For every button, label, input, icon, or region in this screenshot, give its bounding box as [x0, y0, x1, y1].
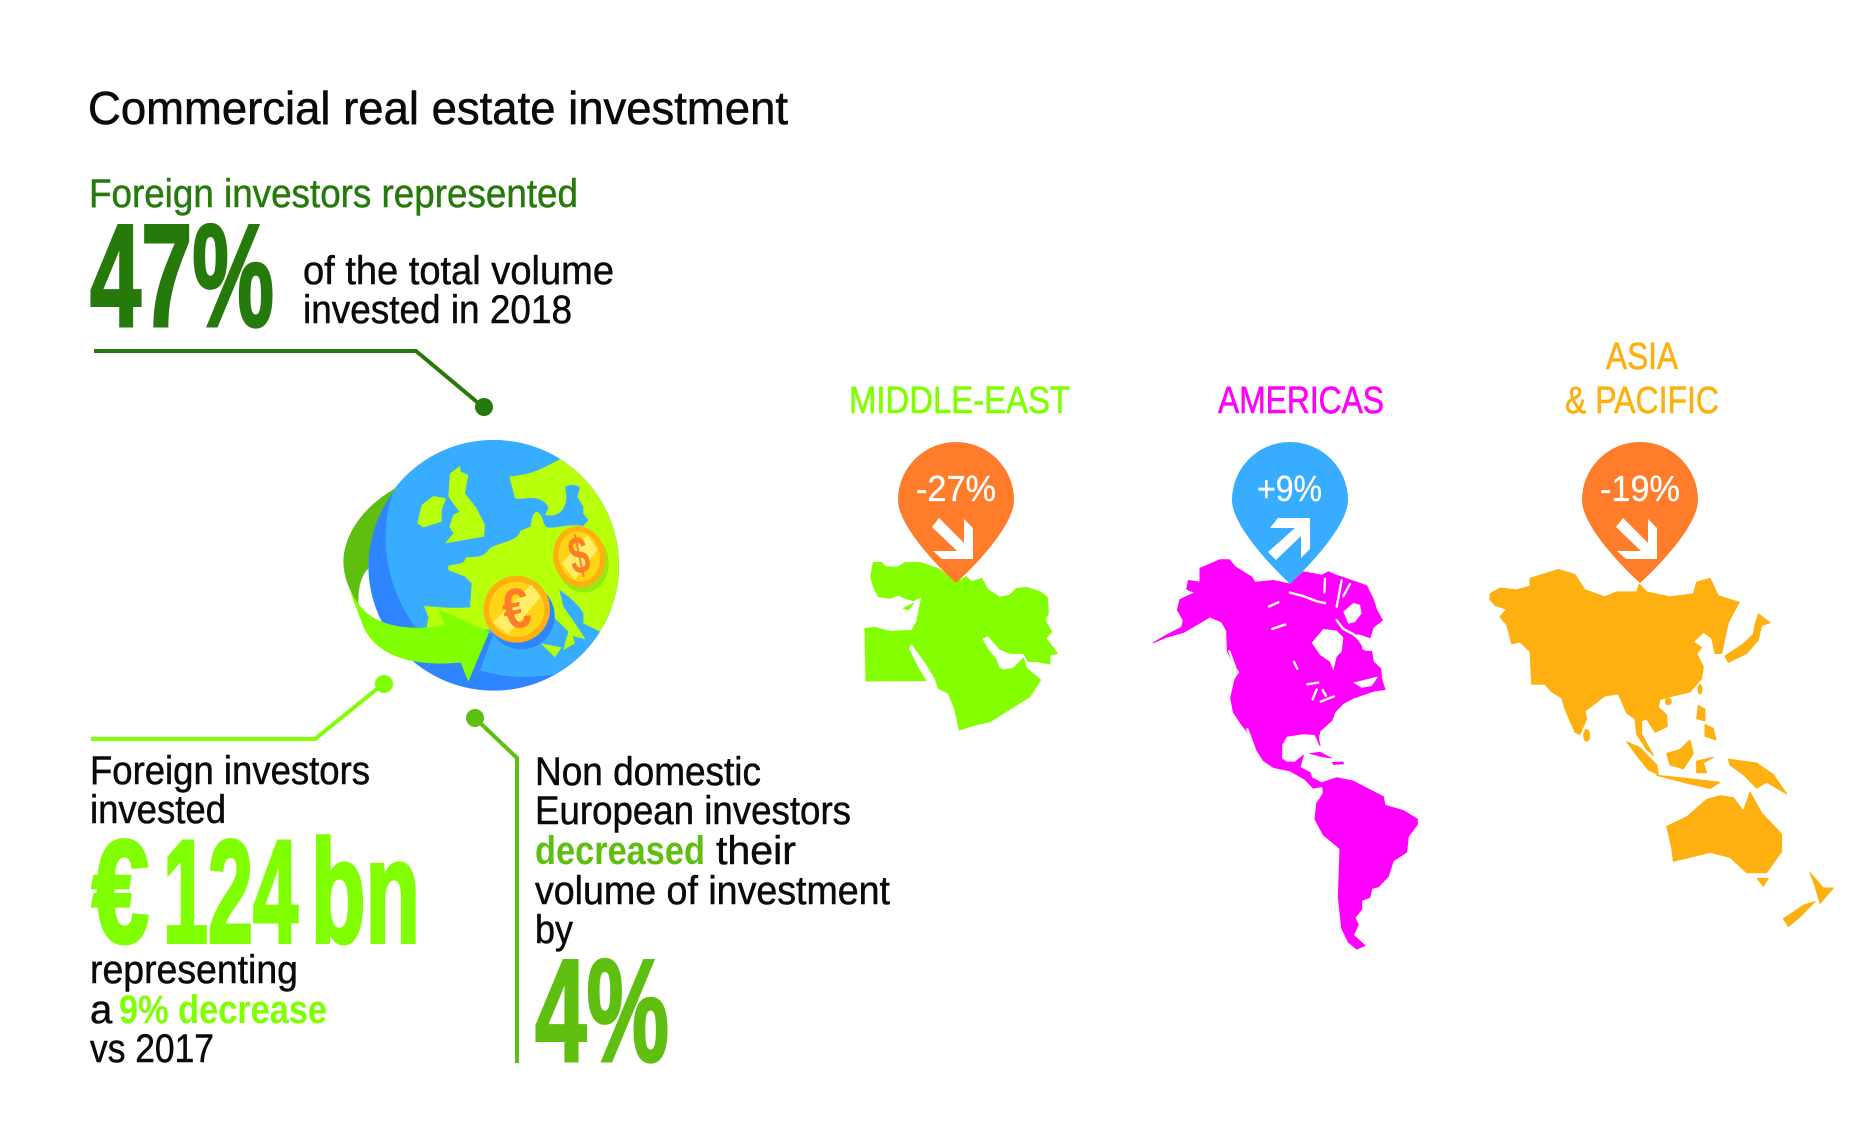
big number € 124 bn: 124 — [163, 810, 298, 973]
arrow up — [1268, 518, 1310, 560]
intro text: Foreign investors — [90, 749, 370, 793]
panel: Asia & Pacific — [1490, 336, 1833, 927]
change text: vs 2017 — [90, 1027, 214, 1071]
pin: +9%: +9% — [1257, 468, 1322, 509]
big number 4%: 4% — [535, 929, 669, 1092]
arrow around globe — [343, 487, 489, 682]
panel: Americas — [1153, 380, 1417, 949]
dollar coin: $ — [564, 525, 595, 587]
description: invested in 2018 — [303, 288, 572, 332]
subheading: Foreign investors represented — [89, 172, 578, 216]
arrow down — [932, 518, 973, 559]
pin: -19% — [1582, 442, 1698, 583]
region label — [1565, 336, 1719, 422]
change text: representing — [90, 948, 298, 992]
region label: MIDDLE-EAST — [849, 380, 1070, 422]
intro text: invested — [90, 788, 226, 832]
map: Asia Pacific — [1490, 570, 1833, 927]
euro coin — [483, 576, 555, 649]
description: Non domestic — [535, 750, 761, 794]
region label: ASIA — [1606, 336, 1679, 378]
panel: foreign share 47% — [89, 172, 614, 416]
panel: Middle-East — [849, 380, 1070, 730]
arrow down — [1616, 518, 1657, 559]
globe base — [368, 440, 619, 691]
title: Commercial real estate investment — [88, 82, 788, 134]
connector line to globe — [94, 351, 493, 416]
description — [535, 750, 890, 952]
change text — [90, 948, 327, 1071]
pin: -27% — [898, 442, 1014, 583]
region label: & PACIFIC — [1565, 380, 1719, 422]
change text: 9% decrease — [119, 988, 327, 1032]
icon: globe with coins and arrow — [343, 440, 619, 691]
description: European investors — [535, 789, 851, 833]
euro coin: € — [496, 576, 536, 643]
pin: -27%: -27% — [916, 468, 996, 509]
region label: AMERICAS — [1218, 380, 1384, 422]
description: volume of investment — [535, 869, 890, 913]
description: decreased — [535, 829, 705, 873]
change text: a — [90, 988, 113, 1032]
pin: +9% — [1232, 442, 1348, 584]
description: of the total volume — [303, 249, 614, 293]
panel: non domestic European investors — [466, 709, 890, 1092]
map: Middle East — [865, 562, 1057, 730]
intro text — [90, 749, 370, 832]
globe ocean — [386, 440, 619, 677]
big number 47%: 47% — [90, 194, 274, 357]
dollar coin — [548, 522, 614, 597]
globe land — [417, 459, 619, 658]
pin: -19%: -19% — [1600, 468, 1680, 509]
connector line to globe — [91, 675, 393, 739]
description: by — [535, 908, 573, 952]
connector line to globe — [466, 709, 517, 1063]
big number € 124 bn: € — [92, 810, 149, 973]
description: their — [716, 829, 796, 873]
description — [303, 249, 614, 332]
panel: foreign investors invested — [90, 675, 420, 1071]
big number € 124 bn: bn — [311, 810, 420, 973]
map: Americas — [1153, 560, 1417, 949]
